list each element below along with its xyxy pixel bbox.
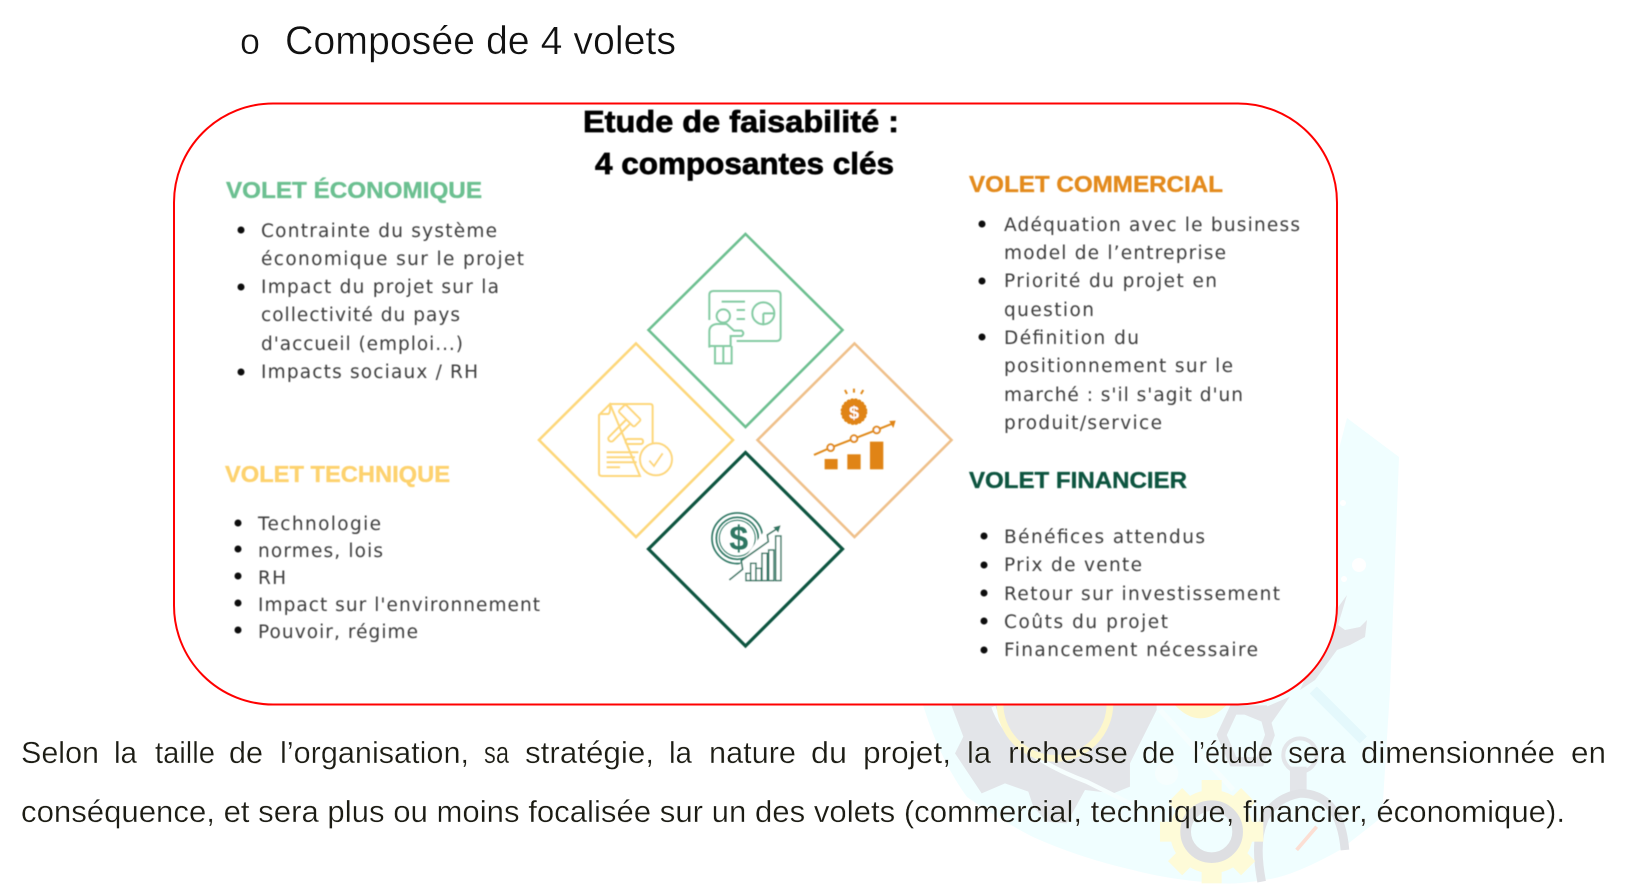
text block: conclusion paragraph: la xyxy=(114,735,138,770)
list: volet financier: Financement nécessaire xyxy=(1004,640,1258,661)
icon: legal document with gavel xyxy=(599,404,672,476)
list: volet financier: Prix de vente xyxy=(1004,555,1142,576)
list: volet commercial: positionnement sur le xyxy=(1004,356,1233,377)
list: volet économique: d'accueil (emploi...) xyxy=(261,334,463,355)
text block: conclusion paragraph: en xyxy=(1571,735,1606,770)
diamond: yellow, technique xyxy=(539,344,733,537)
list: volet technique: Impact sur l'environnement xyxy=(258,595,540,616)
list: volet financier xyxy=(980,527,1280,661)
list: volet commercial: Adéquation avec le business xyxy=(1004,215,1300,236)
heading: Composée de 4 volets: Composée de 4 volets xyxy=(285,19,676,63)
text block: conclusion paragraph: de xyxy=(229,735,263,770)
list: volet économique xyxy=(238,221,524,383)
heading: volet commercial: VOLET COMMERCIAL xyxy=(969,171,1223,197)
infographic: étude de faisabilité xyxy=(225,104,1300,661)
list: volet financier: Bénéfices attendus xyxy=(1004,527,1205,548)
text block: conclusion paragraph: de xyxy=(1142,735,1175,770)
text block: conclusion paragraph: dimensionnée xyxy=(1361,735,1555,770)
text block: conclusion paragraph: projet, xyxy=(863,735,951,770)
text block: conclusion paragraph: l’organisation, xyxy=(280,735,469,770)
icon: dollar coin and growth chart: $ xyxy=(729,520,748,558)
list: volet technique: normes, lois xyxy=(258,541,383,562)
icon: dollar badge and rising bars xyxy=(814,389,896,469)
icon: dollar badge and rising bars: $ xyxy=(849,402,859,422)
diamond: green, économique xyxy=(648,234,842,427)
title: Etude de faisabilité xyxy=(583,104,899,181)
list: volet commercial: model de l’entreprise xyxy=(1004,243,1226,264)
heading: volet technique: VOLET TECHNIQUE xyxy=(225,461,450,487)
list: volet économique: économique sur le projet xyxy=(261,249,524,270)
panel: red rounded frame xyxy=(174,104,1337,704)
list: volet technique xyxy=(234,514,540,643)
list: volet économique: Impact du projet sur la xyxy=(261,277,499,298)
text block: conclusion paragraph: taille xyxy=(155,735,215,770)
list: volet commercial: marché : s'il s'agit d'un xyxy=(1004,385,1243,406)
panel: volet économique xyxy=(226,176,524,383)
panel: volet commercial xyxy=(969,171,1300,434)
list: volet technique: Pouvoir, régime xyxy=(258,622,418,643)
text block: conclusion paragraph: la xyxy=(967,735,992,770)
list: volet financier: Retour sur investissement xyxy=(1004,584,1280,605)
text block: conclusion paragraph: richesse xyxy=(1008,735,1128,770)
list: volet commercial xyxy=(978,215,1300,434)
list: volet financier: Coûts du projet xyxy=(1004,612,1168,633)
text block: conclusion paragraph: nature xyxy=(709,735,796,770)
heading: volet financier: VOLET FINANCIER xyxy=(969,467,1187,493)
text block: conclusion paragraph: Selon xyxy=(21,735,99,770)
title: Etude de faisabilité: 4 composantes clés xyxy=(595,146,894,181)
list: volet commercial: Définition du xyxy=(1004,328,1139,349)
list: volet économique: Impacts sociaux / RH xyxy=(261,362,478,383)
text block: conclusion paragraph: conséquence, et sera plus ou moins focalisée sur un des volets (commercial, technique, financier, économique). xyxy=(21,794,1565,829)
text block: conclusion paragraph: sera xyxy=(1288,735,1347,770)
list: volet commercial: question xyxy=(1004,300,1094,321)
icon: dollar coin and growth chart xyxy=(712,513,787,587)
list: volet commercial: Priorité du projet en xyxy=(1004,271,1217,292)
text block: conclusion paragraph: la xyxy=(669,735,693,770)
list: volet économique: collectivité du pays xyxy=(261,305,460,326)
diamond: dark green, financier xyxy=(648,452,842,646)
text block: conclusion paragraph: du xyxy=(811,735,847,770)
text block: conclusion paragraph: stratégie, xyxy=(525,735,654,770)
list: volet économique: Contrainte du système xyxy=(261,221,497,242)
text block: conclusion paragraph: sa xyxy=(484,735,510,770)
panel: volet financier xyxy=(969,467,1280,661)
text block: conclusion paragraph: l’étude xyxy=(1193,735,1273,770)
diamond: orange, commercial xyxy=(758,344,952,537)
list: volet technique: Technologie xyxy=(257,514,381,535)
heading: Composée de 4 volets: o xyxy=(240,21,260,62)
list: volet commercial: produit/service xyxy=(1004,413,1162,434)
list: volet technique: RH xyxy=(258,568,286,589)
icon: presenter at board xyxy=(709,291,781,363)
panel: volet technique xyxy=(225,461,540,643)
title: Etude de faisabilité: Etude de faisabilité : xyxy=(583,104,899,139)
heading: volet économique: VOLET ÉCONOMIQUE xyxy=(226,176,482,203)
watermark: faded gears background xyxy=(923,418,1399,884)
text block: conclusion paragraph xyxy=(21,735,1606,829)
